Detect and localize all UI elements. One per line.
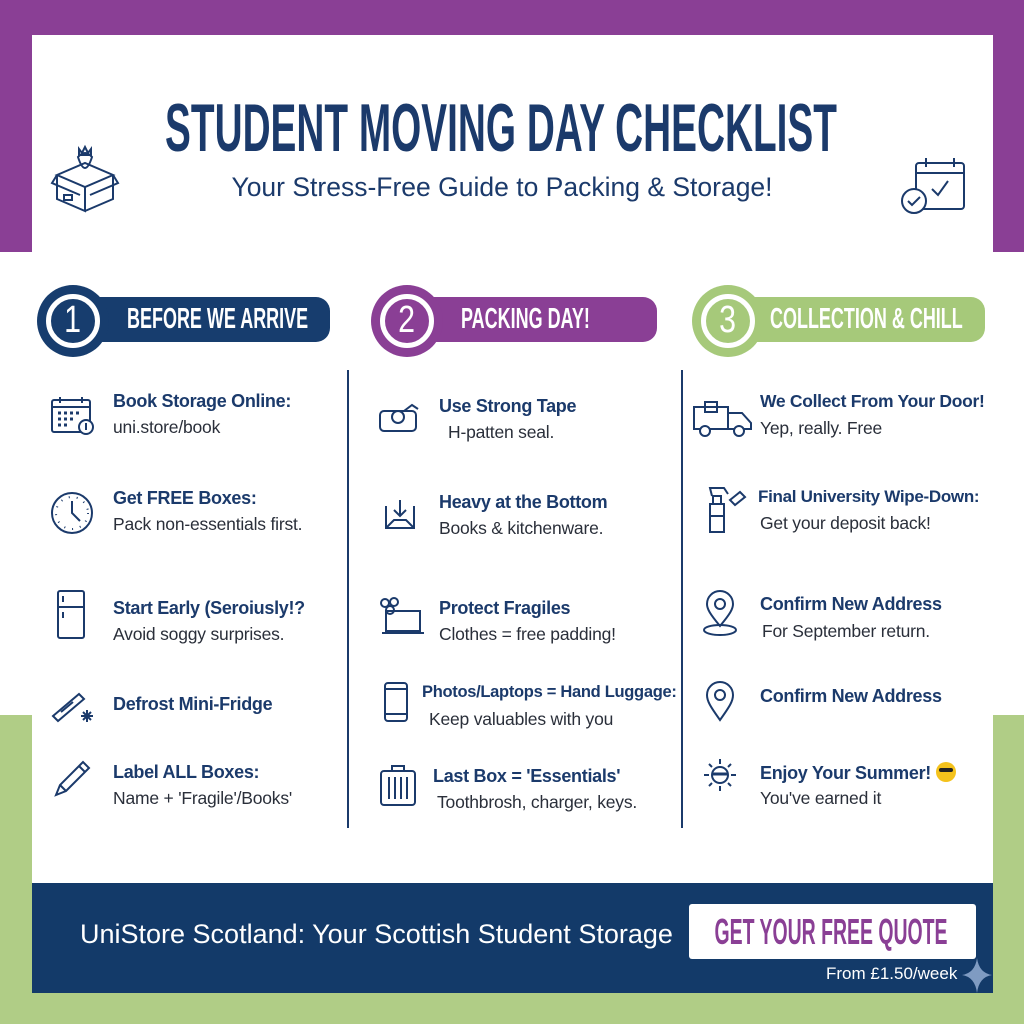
price note: From £1.50/week	[826, 964, 957, 983]
column 3: Final University Wipe-Down:	[758, 487, 979, 506]
column 1	[51, 391, 305, 808]
column 1: Label ALL Boxes:	[113, 762, 259, 782]
column 2: Protect Fragiles	[439, 598, 570, 618]
dividers	[347, 370, 349, 828]
icon: pin 2	[706, 681, 734, 722]
column 2: Use Strong Tape	[439, 396, 576, 416]
header 3	[692, 285, 985, 357]
column 3: Get your deposit back!	[760, 513, 931, 533]
header 2	[371, 285, 657, 357]
column 2: Books & kitchenware.	[439, 518, 603, 538]
icon: truck	[693, 401, 752, 437]
column 3: For September return.	[762, 621, 930, 641]
icon: calendar check	[901, 158, 965, 214]
subtitle: Your Stress-Free Guide to Packing & Storage!	[231, 172, 773, 202]
header 1: BEFORE WE ARRIVE	[127, 303, 308, 335]
column 2: H-patten seal.	[448, 422, 554, 442]
icon: spray	[708, 487, 746, 533]
header 3: 3	[720, 299, 736, 341]
column 3: Confirm New Address	[760, 594, 942, 614]
footer banner	[32, 883, 993, 993]
icon: phone	[384, 682, 408, 722]
icon: pencil	[54, 760, 90, 797]
icon: defrost	[52, 692, 93, 722]
column 2: Keep valuables with you	[429, 709, 613, 729]
column 3: We Collect From Your Door!	[760, 391, 985, 411]
column 3: Enjoy Your Summer!	[760, 763, 931, 783]
icon: box down	[385, 500, 415, 529]
icon: tape	[379, 404, 418, 432]
icon: suitcase	[380, 765, 416, 806]
column 1: Pack non-essentials first.	[113, 514, 302, 534]
header 2: 2	[399, 299, 415, 341]
column 1: Get FREE Boxes:	[113, 488, 257, 508]
column 3	[693, 391, 985, 808]
title: STUDENT MOVING DAY CHECKLIST	[165, 90, 837, 166]
icon: box with thistle	[50, 144, 120, 212]
background: purple top	[0, 0, 1024, 252]
sparkle	[962, 958, 992, 993]
icon: clock	[51, 492, 93, 534]
icon: pin	[703, 590, 737, 636]
header 3: COLLECTION & CHILL	[770, 303, 963, 335]
footer text: UniStore Scotland: Your Scottish Student Storage	[80, 919, 673, 949]
column 3: Confirm New Address	[760, 686, 942, 706]
column 1: Avoid soggy surprises.	[113, 624, 284, 644]
column 1: Name + 'Fragile'/Books'	[113, 788, 292, 808]
column 2: Last Box = 'Essentials'	[433, 766, 620, 786]
background: green bottom	[0, 715, 1024, 1024]
column 1: Book Storage Online:	[113, 391, 291, 411]
button: quote: GET YOUR FREE QUOTE	[715, 911, 947, 952]
icon: calendar	[51, 397, 94, 435]
button: quote	[689, 904, 976, 959]
column 1: uni.store/book	[113, 417, 220, 437]
column 2: Heavy at the Bottom	[439, 492, 607, 512]
white card	[32, 35, 993, 885]
header 1	[37, 285, 330, 357]
icon: sun	[704, 759, 736, 791]
column 1: Defrost Mini-Fridge	[113, 694, 272, 714]
column 2: Photos/Laptops = Hand Luggage:	[422, 683, 677, 701]
column 3: You've earned it	[760, 788, 881, 808]
header 1: 1	[65, 299, 81, 341]
column 1: Start Early (Seroiusly!?	[113, 598, 305, 618]
column 3: Yep, really. Free	[760, 418, 882, 438]
icon: fridge	[57, 590, 85, 639]
icon: laptop flowers	[380, 597, 424, 634]
column 2: Toothbrosh, charger, keys.	[437, 792, 637, 812]
column 2: Clothes = free padding!	[439, 624, 616, 644]
column 2	[379, 396, 677, 812]
header 2: PACKING DAY!	[461, 303, 590, 335]
